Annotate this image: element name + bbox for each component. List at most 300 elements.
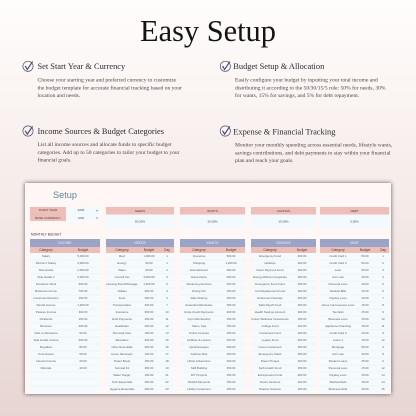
table: wants: Extended Warranties (186, 303, 213, 307)
table: needs: 21 (165, 373, 169, 377)
card: savings: SAVINGS (277, 209, 290, 213)
table: wants: 200.00 (227, 345, 236, 349)
table: wants: Hobby Investment (187, 387, 211, 391)
table: savings: 200.00 (298, 380, 307, 384)
table: needs: Power Boost (114, 359, 130, 363)
table: income: Passive Income (36, 310, 57, 314)
table: debt: Personal Loan (329, 366, 348, 370)
table: wants (180, 239, 245, 393)
table: income (30, 239, 100, 393)
text: expense tracking description: savings contributions, and debt payments to stay within your financial (235, 149, 391, 156)
table: savings: 150.00 (298, 387, 307, 391)
table: savings: Future Ventures (260, 380, 281, 384)
table: income: 500.00 (79, 282, 88, 286)
table: wants: Entertainment (190, 268, 208, 272)
settings block: START YEAR (39, 208, 58, 212)
table: needs: 200.00 (145, 387, 154, 391)
table: debt: 25.00 (361, 359, 369, 363)
table: income: Dividends (40, 317, 53, 321)
card: needs (106, 207, 174, 228)
table: wants: 150.00 (227, 282, 236, 286)
table: needs: 22 (165, 380, 169, 384)
table: debt: 15.00 (361, 373, 369, 377)
table: needs: Budget (144, 248, 154, 252)
table: debt: 4 (382, 345, 384, 349)
table: needs: Tech Essentials (112, 380, 133, 384)
table: wants: Hobbies & Leisure (187, 338, 211, 342)
table: debt: 30.00 (361, 275, 369, 279)
section: income sources and budget categories (23, 126, 180, 163)
table: savings: Emergency Stash (259, 352, 282, 356)
table: savings: Retirement Savings (257, 296, 283, 300)
card: wants: WANTS (207, 209, 218, 213)
table: wants: Dining Out (192, 289, 206, 293)
table: wants: Streaming Services (186, 282, 212, 286)
table: wants: 200.00 (227, 359, 236, 363)
table: income: 5,000.00 (77, 254, 89, 258)
card: debt: DEBT (350, 209, 359, 213)
table: debt: 12 (381, 338, 385, 342)
table: savings: 200.00 (298, 373, 307, 377)
table: needs: 13 (165, 331, 169, 335)
table: income: 1,200.00 (77, 303, 89, 307)
table: debt: Appliance Financing (325, 324, 351, 328)
table: needs: NEEDS (134, 241, 146, 245)
table: savings: 200.00 (298, 331, 307, 335)
table: needs: 7 (166, 303, 168, 307)
table: savings: 150.00 (298, 366, 307, 370)
table: needs: 16 (165, 345, 169, 349)
table: needs: Other Essentials (111, 345, 133, 349)
table: debt: Home Improvement Loan (322, 303, 355, 307)
text: income sources description: financial goals. (38, 156, 72, 163)
text: set start year description: location and needs. (38, 93, 81, 99)
table: savings: 250.00 (298, 345, 307, 349)
table: wants: Mindful Moments (188, 380, 211, 384)
table: income: Rental Income (37, 303, 56, 307)
settings block: USD (78, 216, 85, 220)
table: wants: 300.00 (227, 268, 236, 272)
text: income sources description: List all income sources and allocate funds to specific budget (38, 141, 172, 148)
table: debt: 30.00 (361, 387, 369, 391)
table: wants: 200.00 (227, 310, 236, 314)
table: income: Budget (78, 248, 88, 252)
table: needs: 200.00 (145, 338, 154, 342)
table: debt: 12 (381, 366, 385, 370)
table: debt: 9 (382, 310, 384, 314)
table: needs: 150.00 (145, 331, 154, 335)
table: needs: 200.00 (145, 345, 154, 349)
table: debt: 50.00 (361, 254, 369, 258)
table: needs: Home Sanctuary (111, 352, 133, 356)
table: debt: 15.00 (361, 324, 369, 328)
table: savings: College Fund (261, 324, 279, 328)
table: wants: Fashion Flair (191, 352, 207, 356)
table: wants: Urban Adventures (187, 359, 211, 363)
text: budget setup description: for wants, 15% for savings, and 5% for debt repayment. (235, 92, 360, 99)
table: savings: Self-Growth Fund (259, 366, 282, 370)
table: needs: 18 (165, 359, 169, 363)
section: expense and financial tracking (220, 126, 393, 164)
table: savings: 400.00 (298, 261, 307, 265)
table: debt: Budget (360, 248, 370, 252)
table: income: Side Hustle Income (33, 338, 59, 342)
table: savings: Energy-Efficient Upgrades (253, 275, 287, 279)
table: income: Investment Returns (33, 296, 59, 300)
table: debt: 3 (382, 268, 384, 272)
table: needs: Council Tax (115, 275, 130, 279)
table: wants: DIY Projects (191, 373, 208, 377)
table: debt: 6 (382, 359, 384, 363)
table: savings: 200.00 (298, 289, 307, 293)
table: savings: Budget (297, 248, 307, 252)
table: debt: 20.00 (361, 296, 369, 300)
table: wants: Quick Escapes (189, 345, 209, 349)
table: needs: 23 (165, 387, 169, 391)
icon: check mark (220, 126, 230, 136)
table: income: 2,000.00 (77, 275, 89, 279)
table: savings: Dream Project (261, 359, 279, 363)
table: needs: Survival Kit (115, 366, 129, 370)
table: wants: 150.00 (227, 331, 236, 335)
table: needs: Food (119, 296, 126, 300)
table: wants: 150.00 (227, 338, 236, 342)
table: debt: 8 (382, 303, 384, 307)
card: wants: 30.00% (207, 220, 218, 224)
table: debt: 15.00 (361, 338, 369, 342)
table: debt: 4 (382, 275, 384, 279)
table: needs: 3,000.00 (143, 275, 155, 279)
table: debt: 15.00 (361, 303, 369, 307)
table: wants: Extra Credit Payments (185, 310, 214, 314)
card: debt (320, 207, 389, 228)
table: income: Gifts or Allowance (34, 331, 58, 335)
table: savings: Passive Streams (259, 387, 281, 391)
table: wants: 150.00 (227, 366, 236, 370)
table: needs: Energy (117, 261, 127, 265)
table: debt: 15 (381, 387, 385, 391)
table: wants: Salon, Spa (192, 324, 206, 328)
table: needs: 2 (166, 268, 168, 272)
table: savings: Down Payment Fund (256, 268, 284, 272)
table: needs: 200.00 (145, 324, 154, 328)
text: income sources description: categories. Add up to 50 categories to tailor your budget to your (38, 150, 180, 156)
table: debt: 8 (382, 352, 384, 356)
table: debt: 15.00 (361, 366, 369, 370)
table: debt: Loans 2 (333, 338, 344, 342)
table: savings: Emergency Food Fund (255, 282, 285, 286)
table: savings: 150.00 (298, 317, 307, 321)
table: needs: Utilities (117, 289, 127, 293)
section: set start year and currency (23, 61, 182, 99)
table: debt: 50.00 (361, 261, 369, 265)
table: wants: 150.00 (227, 296, 236, 300)
table: debt: 30.00 (361, 352, 369, 356)
table: debt: Payday Loan (330, 296, 347, 300)
heading: budget setup: Budget Setup & Allocation (233, 62, 325, 71)
table: needs: 250.00 (145, 310, 154, 314)
table: savings: Emergency Fund (259, 254, 281, 258)
text: budget setup description: distributing it according to the 50/30/15/5 rule: 50% for needs, 30% (235, 84, 386, 91)
table: income: Royalties (40, 345, 52, 349)
table: debt: 11 (381, 324, 385, 328)
table: debt: Mortgage (332, 345, 344, 349)
table: needs: 250.00 (145, 317, 154, 321)
table: debt: 15.00 (361, 317, 369, 321)
table: wants: Online Courses (189, 331, 210, 335)
table: savings: Investment Fund (259, 331, 281, 335)
table: savings: 400.00 (298, 254, 307, 258)
table: wants: 500.00 (227, 254, 236, 258)
table: debt: Medical Bills (330, 289, 347, 293)
table: needs: Personal Care (113, 331, 132, 335)
table: income: Freelance Work (36, 282, 57, 286)
table: needs: 250.00 (145, 296, 154, 300)
table: wants: 150.00 (227, 373, 236, 377)
table: needs: Insurance (116, 310, 129, 314)
table: needs: 300.00 (145, 303, 154, 307)
table: income: 20.00 (79, 359, 87, 363)
card: savings (251, 207, 316, 228)
table: income: INCOME (58, 241, 72, 245)
table: debt: 20.00 (361, 331, 369, 335)
table: income: Interest Income (36, 359, 56, 363)
table: needs: 5 (166, 282, 168, 286)
table: income: Category (39, 248, 53, 252)
table: debt: 50.00 (361, 268, 369, 272)
table: debt: Student Loans (329, 359, 348, 363)
table: savings: Green Investment (259, 345, 282, 349)
table: income: 200.00 (79, 324, 88, 328)
table: needs: 120.00 (145, 352, 154, 356)
table: savings: 300.00 (298, 275, 307, 279)
table: income: 40.00 (79, 366, 87, 370)
table: wants: 150.00 (227, 303, 236, 307)
table: savings: Entrepreneur Fund (258, 373, 283, 377)
card: wants (180, 207, 245, 228)
table: debt: Credit Card 3 (329, 331, 347, 335)
table: needs: 90.00 (145, 268, 153, 272)
table: needs: 250.00 (145, 289, 154, 293)
heading: expense tracking: Expense & Financial Tracking (233, 128, 336, 136)
text: budget setup description (235, 77, 386, 99)
settings block: 2025 (78, 208, 85, 212)
panel: spreadsheet screenshot (25, 183, 391, 394)
table: debt: 5 (382, 282, 384, 286)
table: debt: Category (331, 248, 345, 252)
table: wants: Shopping (193, 261, 205, 265)
table: needs: 150.00 (145, 373, 154, 377)
table: needs: 19 (165, 366, 169, 370)
table: debt: 9 (382, 331, 384, 335)
table: needs: Category (115, 248, 129, 252)
heading: set start year: Set Start Year & Currency (38, 62, 126, 71)
table: savings: Future Wellness Investments (251, 317, 289, 321)
table: wants: Budget (226, 248, 236, 252)
text: expense tracking description: Monitor your monthly spending across essential needs, lifestyle wants, (235, 142, 393, 149)
table: debt: Credit Card 1 (329, 254, 347, 258)
table: savings: 200.00 (298, 303, 307, 307)
table: needs: Education (116, 338, 129, 342)
table: debt: Loan (335, 268, 342, 272)
table: income: Business Income (35, 289, 57, 293)
table: needs: 6 (166, 296, 168, 300)
table: debt: Payday Loan (330, 373, 347, 377)
table: needs: 4 (166, 289, 168, 293)
table: wants: 150.00 (227, 289, 236, 293)
table: income: Partner's Salary (36, 261, 57, 265)
text: expense tracking description: plan and reach your goals. (235, 158, 294, 164)
table: income: Side Hustle (39, 268, 54, 272)
table: debt: 15.00 (361, 380, 369, 384)
table: debt: 10 (381, 317, 385, 321)
table: savings: Category (263, 248, 277, 252)
table: needs: 90.00 (145, 261, 153, 265)
icon: check mark (23, 126, 33, 136)
table: savings: 300.00 (298, 296, 307, 300)
table: savings: 200.00 (298, 359, 307, 363)
table: needs: 10 (165, 310, 169, 314)
table: needs: 11 (165, 317, 169, 321)
text: income sources description (38, 141, 180, 163)
table: needs: 1 (166, 261, 168, 265)
table: income: 50.00 (79, 331, 87, 335)
table: needs: 150.00 (145, 359, 154, 363)
text: budget setup description: Easily configure your budget by inputting your total income and (235, 77, 378, 84)
table: wants: 150.00 (227, 317, 236, 321)
table: needs: 1,200.00 (143, 282, 155, 286)
card: savings: 15.00% (278, 220, 289, 224)
table: needs: Debt Payments (112, 317, 132, 321)
table: savings: 400.00 (298, 338, 307, 342)
table: wants: Home Décor (191, 275, 207, 279)
table: income: 150.00 (79, 296, 88, 300)
table: income: 150.00 (79, 317, 88, 321)
table: debt: Car Loan (332, 275, 344, 279)
table: savings: 200.00 (298, 324, 307, 328)
card: debt: 5.00% (350, 220, 359, 224)
table: income: 80.00 (79, 345, 87, 349)
table: needs: 15 (165, 338, 169, 342)
table: savings: 200.00 (298, 310, 307, 314)
card: needs: 50.00% (135, 220, 145, 224)
table: debt: Medical Debt (330, 380, 347, 384)
table: debt: DEBT (350, 241, 359, 245)
table: wants: Groceries (193, 254, 206, 258)
table: debt: Tax Debt (332, 310, 344, 314)
table: debt (320, 239, 389, 393)
icon: check mark (23, 61, 33, 71)
table: debt: 1 (382, 254, 384, 258)
title: Easy Setup (140, 14, 276, 48)
table: wants: 200.00 (227, 275, 236, 279)
table: needs: Day (164, 248, 170, 252)
table: needs: Water (118, 268, 126, 272)
table: income: 50.00 (79, 352, 87, 356)
table: income: 4,000.00 (77, 261, 89, 265)
table: savings: 300.00 (298, 268, 307, 272)
table: savings: 150.00 (298, 282, 307, 286)
table: debt: 14 (381, 373, 385, 377)
table: needs: 1 (166, 254, 168, 258)
table: savings: SAVINGS (276, 241, 292, 245)
table: needs: 250.00 (145, 380, 154, 384)
table: savings: Legacy Fund (262, 338, 279, 342)
section: budget setup and allocation (220, 61, 386, 99)
table: needs: Hygiene Essentials (110, 387, 135, 391)
settings block (30, 207, 100, 221)
card: needs: NEEDS (135, 209, 145, 213)
table: needs: 150.00 (145, 366, 154, 370)
table: savings: Debt Payoff Fund (259, 303, 282, 307)
table: debt: 20.00 (361, 289, 369, 293)
table: income: Side Hustle 2 (37, 275, 55, 279)
table: needs: 12 (165, 324, 169, 328)
table: income: 300.00 (79, 310, 88, 314)
table: needs: Housing /Rent/Mortgage (106, 282, 138, 286)
table: debt: 14 (381, 380, 385, 384)
table: debt: Day (380, 248, 386, 252)
table: needs: Healthcare (115, 324, 129, 328)
table: wants: 150.00 (227, 380, 236, 384)
table: income: Salary (42, 254, 51, 258)
table: income: 200.00 (79, 338, 88, 342)
table: needs: 17 (165, 352, 169, 356)
table: needs: 1,300.00 (143, 254, 155, 258)
table: income: Refunds (41, 366, 52, 370)
table: debt: Credit Card 2 (329, 261, 347, 265)
table: income: 2,000.00 (77, 268, 89, 272)
table: debt: 7 (382, 296, 384, 300)
heading: monthly budget: MONTHLY BUDGET (31, 232, 61, 236)
text: set start year description (38, 77, 182, 99)
table: wants: 150.00 (227, 387, 236, 391)
table: savings: 250.00 (298, 352, 307, 356)
table: income: Commission (38, 352, 54, 356)
text: set start year description: the budget template for accurate financial tracking based on your (38, 84, 182, 91)
table: savings (251, 239, 316, 393)
table: savings: Health Savings Account (255, 310, 285, 314)
table: debt: Personal Loan (329, 282, 348, 286)
table: needs: Transportation (113, 303, 132, 307)
table: wants: WANTS (207, 241, 219, 245)
table: wants: 150.00 (227, 352, 236, 356)
table: debt: 30.00 (361, 282, 369, 286)
text: expense tracking description (235, 142, 393, 164)
table: wants: 150.00 (227, 324, 236, 328)
text: set start year description: Choose your starting year and preferred currency to customize (38, 77, 177, 84)
table: needs: 3 (166, 275, 168, 279)
table: debt: Business Loan (329, 317, 348, 321)
table: needs (106, 239, 174, 393)
table: needs: Water Supply (113, 373, 131, 377)
table: debt: 50.00 (361, 345, 369, 349)
table: wants: Skill Building (191, 366, 208, 370)
table: wants: Gym Membership (188, 317, 211, 321)
table: debt: 2 (382, 261, 384, 265)
table: wants: Ride Sharing (191, 296, 208, 300)
table: wants: Category (192, 248, 206, 252)
table: savings: Holidays (264, 261, 276, 265)
heading: income sources: Income Sources & Budget Categories (38, 127, 164, 136)
settings block: BASE CURRENCY (35, 216, 61, 220)
table: wants: 1,200.00 (225, 261, 237, 265)
icon: check mark (220, 61, 230, 71)
table: income: Bonuses (40, 324, 52, 328)
table: debt: Car Loan (332, 352, 344, 356)
table: needs: Rent (119, 254, 125, 258)
sheet title: Setup (53, 190, 77, 200)
